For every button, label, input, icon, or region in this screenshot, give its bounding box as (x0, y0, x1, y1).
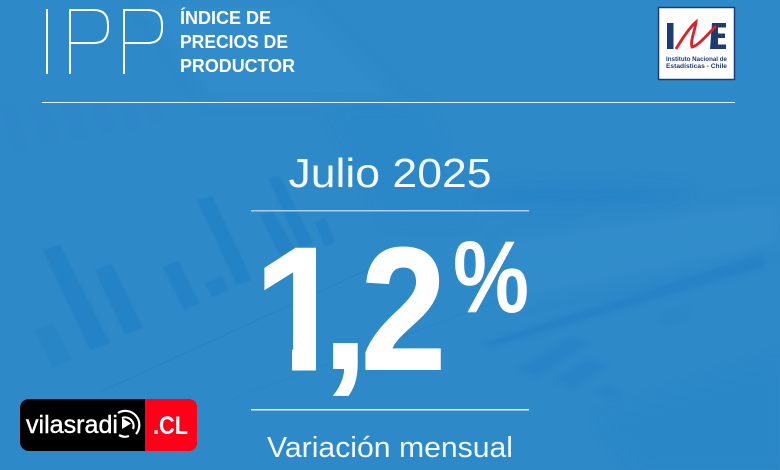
logo: INE (658, 8, 734, 80)
title: IPP (47, 9, 162, 74)
value: 1,2%: , (321, 211, 369, 406)
badge: vilasradio.CL (20, 399, 197, 451)
logo: INE: Instituto Nacional de (666, 56, 727, 63)
badge: vilasradio.CL: .CL (153, 412, 188, 440)
subtitle: Índice de precios de productor (180, 7, 295, 76)
heading: Julio 2025: Julio 2025 (288, 150, 492, 196)
top rule (251, 210, 529, 212)
subtitle: Índice de precios de productor: PRECIOS DE (180, 32, 288, 52)
value: 1,2%: 1 (254, 211, 351, 406)
caption: Variación mensual: Variación mensual (267, 432, 513, 464)
badge: vilasradio.CL: vilasradi (26, 411, 118, 439)
bottom rule (251, 409, 529, 410)
logo: INE: Estadísticas - Chile (666, 63, 727, 70)
subtitle: Índice de precios de productor: PRODUCTOR (180, 56, 295, 76)
header divider (42, 102, 735, 103)
value: 1,2% (264, 241, 527, 396)
value: 1,2%: % (453, 220, 529, 334)
value: 1,2%: 2 (361, 211, 446, 406)
subtitle: Índice de precios de productor: ÍNDICE DE (180, 7, 271, 28)
